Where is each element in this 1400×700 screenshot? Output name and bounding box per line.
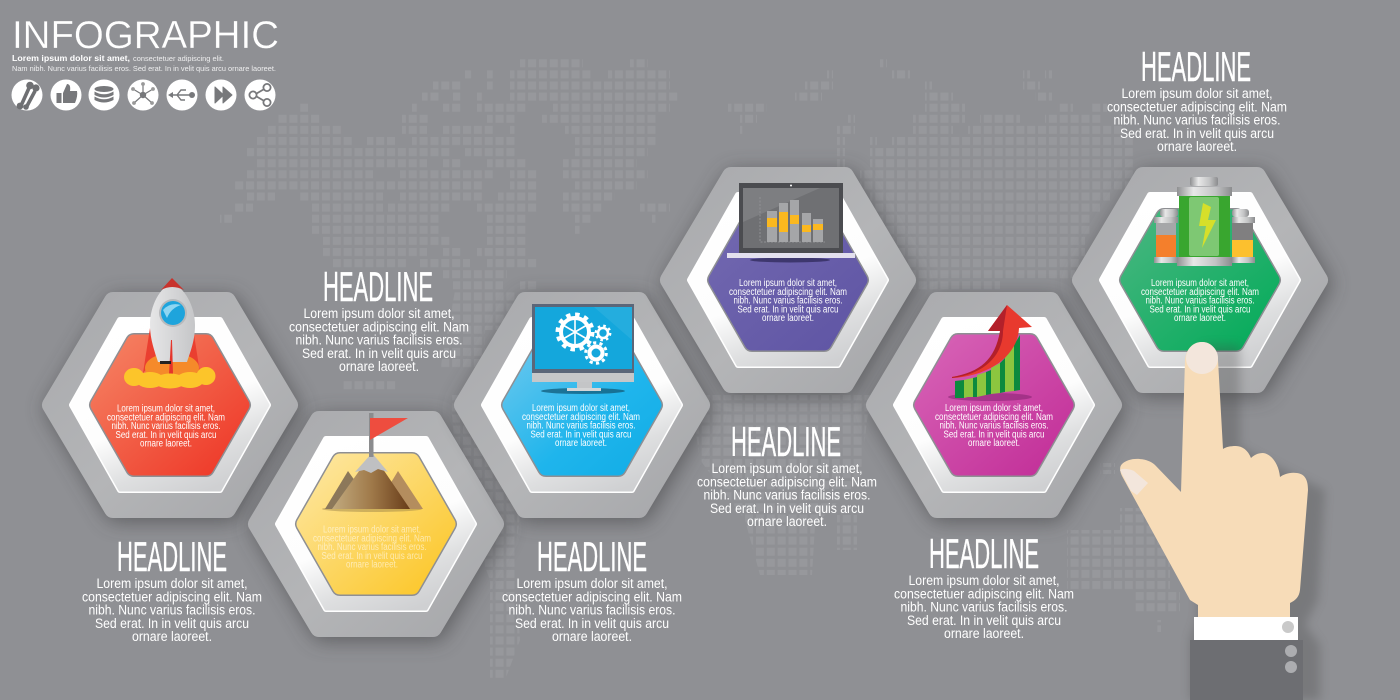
text block: step 1 headline and copy: [82, 533, 262, 645]
text block: step 6 headline and copy: consectetuer adipiscing elit. Nam: [1107, 99, 1287, 115]
text block: step 3 inner: [522, 403, 640, 449]
icon: database: [88, 80, 120, 110]
panel: step 2 yellow hexagon: [257, 420, 498, 632]
icon row: [12, 80, 276, 110]
text block: step 2 inner: Lorem ipsum dolor sit amet,: [323, 524, 421, 536]
text block: step 5 headline and copy: nibh. Nunc varius facilisis eros.: [900, 600, 1068, 616]
text block: step 1 headline and copy: Sed erat. In in velit quis arcu: [95, 616, 249, 632]
panel: step 4 purple hexagon: [669, 176, 910, 388]
icon: gears: [558, 314, 610, 363]
icon: laptop with bar chart: [727, 183, 855, 262]
icon: large green battery: [1177, 177, 1232, 266]
text block: step 4 headline and copy: Lorem ipsum dolor sit amet,: [712, 461, 862, 477]
text block: step 4 inner: consectetuer adipiscing elit. Nam: [729, 287, 847, 298]
text block: step 5 headline and copy: HEADLINE: [929, 530, 1039, 577]
text block: step 1 inner: Sed erat. In in velit quis arcu: [116, 430, 216, 441]
text block: step 1 inner: Lorem ipsum dolor sit amet,: [117, 404, 215, 414]
bar chart: [760, 197, 825, 242]
text block: step 1 headline and copy: ornare laoreet.: [132, 629, 212, 645]
text block: step 5 headline and copy: ornare laoreet.: [944, 626, 1024, 642]
text block: step 6 headline and copy: [1107, 43, 1287, 155]
text block: step 2 headline and copy: nibh. Nunc varius facilisis eros.: [296, 333, 462, 349]
text block: step 4 inner: Sed erat. In in velit quis arcu: [738, 304, 838, 315]
text block: step 6 inner: nibh. Nunc varius facilisis eros.: [1146, 296, 1254, 306]
text block: step 5 inner: nibh. Nunc varius facilisis eros.: [940, 420, 1048, 432]
text block: step 3 headline and copy: nibh. Nunc varius facilisis eros.: [508, 603, 676, 619]
text block: step 3 headline and copy: consectetuer adipiscing elit. Nam: [502, 589, 682, 605]
icon: left orange battery: [1154, 209, 1178, 263]
text block: step 4 headline and copy: nibh. Nunc varius facilisis eros.: [704, 488, 870, 504]
icon: rocket: [124, 278, 216, 388]
text block: step 4 headline and copy: consectetuer adipiscing elit. Nam: [697, 474, 877, 490]
text block: step 5 inner: Lorem ipsum dolor sit amet,: [945, 403, 1043, 414]
text block: step 3 headline and copy: HEADLINE: [537, 533, 647, 580]
text block: step 2 headline and copy: ornare laoreet.: [339, 359, 419, 375]
text block: step 1 inner: ornare laoreet.: [140, 438, 192, 450]
icon: growth chart with arrow: [948, 305, 1032, 401]
text block: step 6 headline and copy: HEADLINE: [1141, 43, 1251, 90]
text block: step 2 inner: ornare laoreet.: [346, 560, 398, 570]
subtitle text: Lorem ipsum dolor sit amet,: [12, 53, 130, 63]
text block: step 3 headline and copy: [502, 533, 682, 645]
icon: pointing hand: [1120, 342, 1325, 700]
text block: step 5 headline and copy: Sed erat. In in velit quis arcu: [907, 613, 1061, 629]
text block: step 5 inner: Sed erat. In in velit quis arcu: [944, 429, 1044, 440]
text block: step 4 inner: nibh. Nunc varius facilisis eros.: [734, 296, 842, 306]
icon: wrenches: [12, 80, 42, 110]
text block: step 4 inner: [729, 278, 847, 324]
text block: step 3 inner: Sed erat. In in velit quis arcu: [530, 429, 632, 440]
text block: step 5 inner: consectetuer adipiscing elit. Nam: [935, 412, 1053, 423]
panel: step 6 green hexagon: [1081, 176, 1322, 388]
icon: monitor with gears: [532, 304, 634, 394]
text block: step 4 headline and copy: Sed erat. In in velit quis arcu: [710, 501, 864, 517]
text block: step 6 inner: [1141, 278, 1259, 324]
text block: step 2 inner: Sed erat. In in velit quis arcu: [322, 551, 422, 562]
subtitle text: consectetuer adipiscing elit.: [133, 54, 224, 63]
text block: step 6 inner: Sed erat. In in velit quis arcu: [1150, 304, 1250, 315]
text block: step 5 headline and copy: [894, 530, 1074, 642]
text block: step 2 inner: consectetuer adipiscing elit. Nam: [313, 533, 431, 544]
icon: thumbnail: [1120, 469, 1148, 495]
text block: step 6 inner: consectetuer adipiscing elit. Nam: [1141, 287, 1259, 298]
text block: step 4 inner: Lorem ipsum dolor sit amet,: [739, 278, 837, 289]
text block: step 6 inner: ornare laoreet.: [1174, 313, 1226, 324]
text block: step 2 inner: nibh. Nunc varius facilisis eros.: [318, 542, 426, 553]
icon: thumbs up: [50, 80, 82, 110]
text block: step 3 inner: Lorem ipsum dolor sit amet,: [532, 403, 630, 414]
subtitle text: Nam nibh. Nunc varius facilisis eros. Sed erat. In in velit quis arcu ornare laoreet.: [12, 64, 276, 73]
icon: cuff button: [1282, 621, 1294, 633]
panel: step 5 pink hexagon: [875, 301, 1116, 513]
icon: right yellow battery: [1232, 209, 1255, 263]
text block: step 1 inner: nibh. Nunc varius facilisis eros.: [112, 421, 220, 432]
text block: step 1 headline and copy: nibh. Nunc varius facilisis eros.: [88, 603, 256, 619]
icon: share: [244, 80, 276, 110]
icon: fast forward: [206, 80, 236, 110]
text block: step 5 inner: [935, 403, 1053, 449]
dotted world map: [220, 59, 1180, 680]
text block: step 5 headline and copy: consectetuer adipiscing elit. Nam: [894, 586, 1074, 602]
text block: step 5 headline and copy: Lorem ipsum dolor sit amet,: [908, 573, 1060, 589]
text block: step 3 headline and copy: ornare laoreet.: [552, 629, 632, 645]
text block: step 4 headline and copy: ornare laoreet.: [747, 514, 827, 530]
text block: step 4 headline and copy: [697, 418, 877, 530]
text block: step 5 inner: ornare laoreet.: [968, 438, 1020, 449]
icon: sleeve button top: [1285, 645, 1297, 657]
text block: step 1 inner: [107, 404, 225, 450]
text block: step 3 inner: consectetuer adipiscing elit. Nam: [522, 412, 640, 423]
text block: step 2 inner: [313, 524, 431, 570]
icon: shirt cuff: [1194, 617, 1298, 640]
icon: mountain with flag: [322, 413, 423, 512]
text block: step 6 headline and copy: ornare laoreet.: [1157, 139, 1237, 155]
panel: step 1 red hexagon: [51, 301, 292, 513]
text block: step 1 headline and copy: consectetuer adipiscing elit. Nam: [82, 589, 262, 605]
text block: step 3 inner: nibh. Nunc varius facilisis eros.: [526, 420, 636, 432]
title: INFOGRAPHIC: [12, 14, 279, 57]
text block: step 6 headline and copy: Lorem ipsum dolor sit amet,: [1122, 86, 1272, 102]
text block: step 3 inner: ornare laoreet.: [555, 438, 607, 449]
icon: batteries: [1154, 177, 1255, 266]
text block: step 2 headline and copy: HEADLINE: [323, 263, 433, 310]
text block: step 3 headline and copy: Lorem ipsum dolor sit amet,: [516, 576, 668, 592]
subtitle text: [12, 53, 276, 73]
text block: step 1 headline and copy: HEADLINE: [117, 533, 227, 580]
icon: usb: [166, 80, 198, 110]
text block: step 1 inner: consectetuer adipiscing elit. Nam: [107, 412, 225, 423]
text block: step 4 headline and copy: HEADLINE: [731, 418, 841, 465]
panel: step 3 blue hexagon: [463, 301, 704, 513]
text block: step 2 headline and copy: consectetuer adipiscing elit. Nam: [289, 319, 469, 335]
icon: sleeve button bottom: [1285, 661, 1297, 673]
text block: step 2 headline and copy: Sed erat. In in velit quis arcu: [302, 346, 456, 362]
text block: step 2 headline and copy: Lorem ipsum dolor sit amet,: [304, 306, 454, 322]
text block: step 6 headline and copy: Sed erat. In in velit quis arcu: [1120, 126, 1274, 142]
text block: step 4 inner: ornare laoreet.: [762, 313, 814, 324]
text block: step 6 inner: Lorem ipsum dolor sit amet,: [1151, 278, 1249, 289]
text block: step 6 headline and copy: nibh. Nunc varius facilisis eros.: [1114, 113, 1280, 129]
icon: index fingernail: [1186, 342, 1218, 374]
icon: network hub: [128, 80, 158, 110]
text block: step 2 headline and copy: [289, 263, 469, 375]
icon: jacket sleeve: [1190, 640, 1303, 700]
text block: step 1 headline and copy: Lorem ipsum dolor sit amet,: [96, 576, 248, 592]
text block: step 3 headline and copy: Sed erat. In in velit quis arcu: [515, 616, 669, 632]
